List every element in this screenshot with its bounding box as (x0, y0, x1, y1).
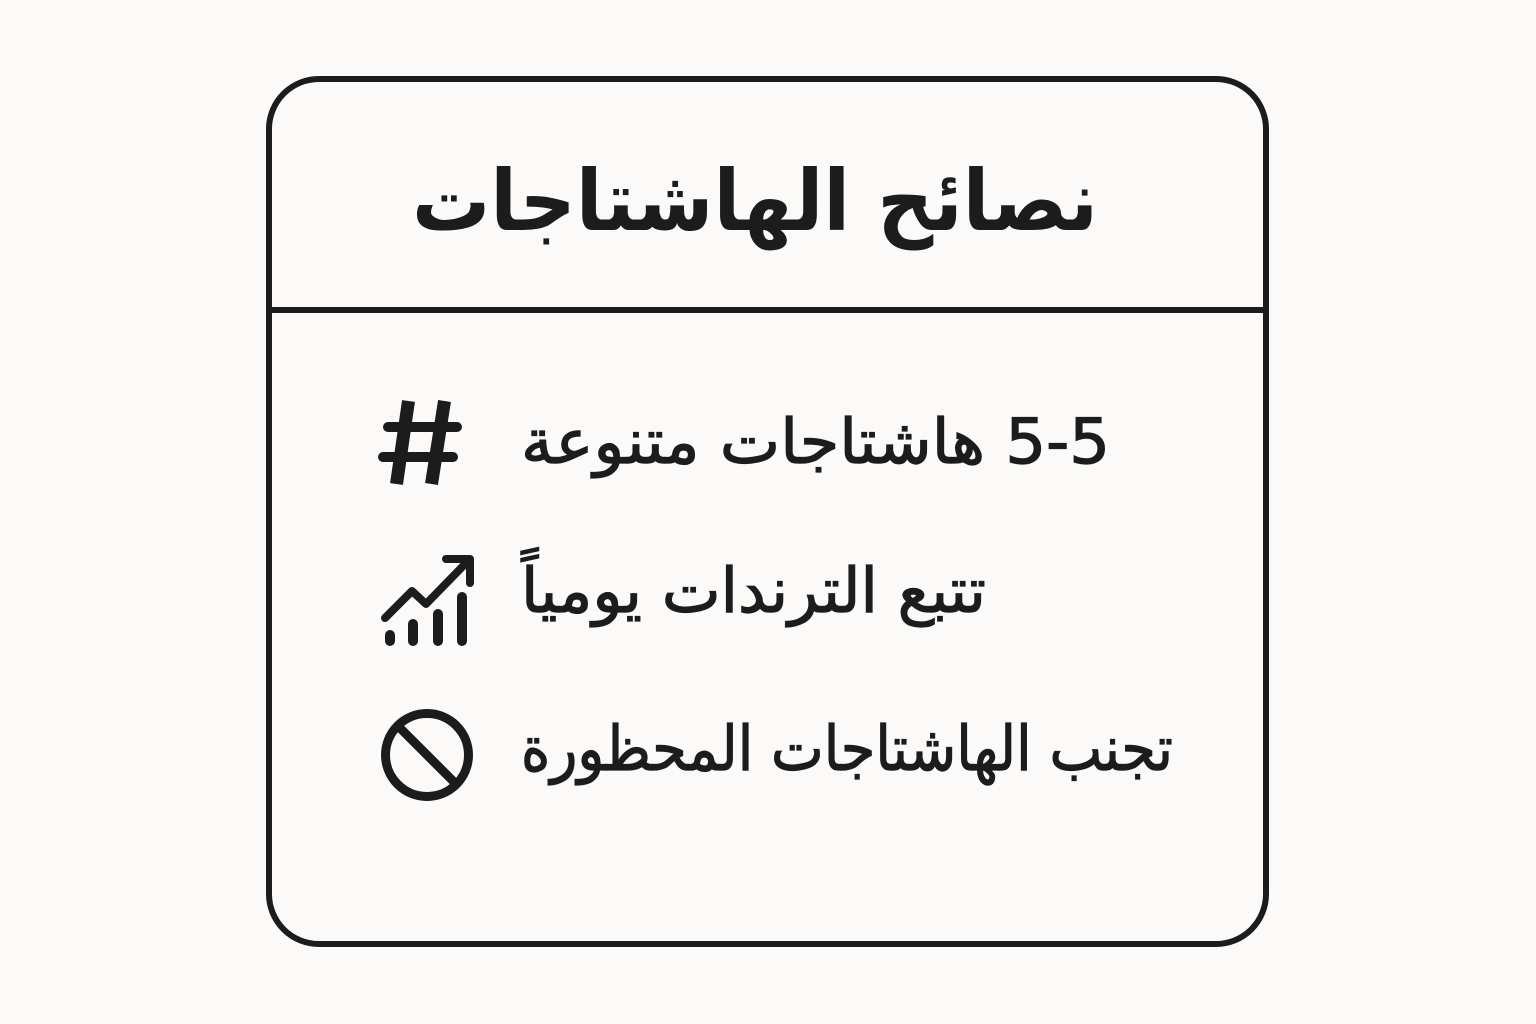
text: follow trends tip: تتبع الترندات يومياً (520, 546, 986, 627)
text: varied hashtags tip: 5-5 هاشتاجات متنوعة (521, 405, 1110, 478)
icon: prohibited sign (386, 714, 468, 796)
title: نصائح الهاشتاجات (412, 152, 1098, 251)
icon: trending chart (385, 559, 470, 641)
text: avoid banned hashtags tip: تجنب الهاشتاجات المحظورة (521, 712, 1173, 786)
icon: hashtag (383, 401, 457, 484)
panel: hashtag tips card (269, 79, 1266, 944)
